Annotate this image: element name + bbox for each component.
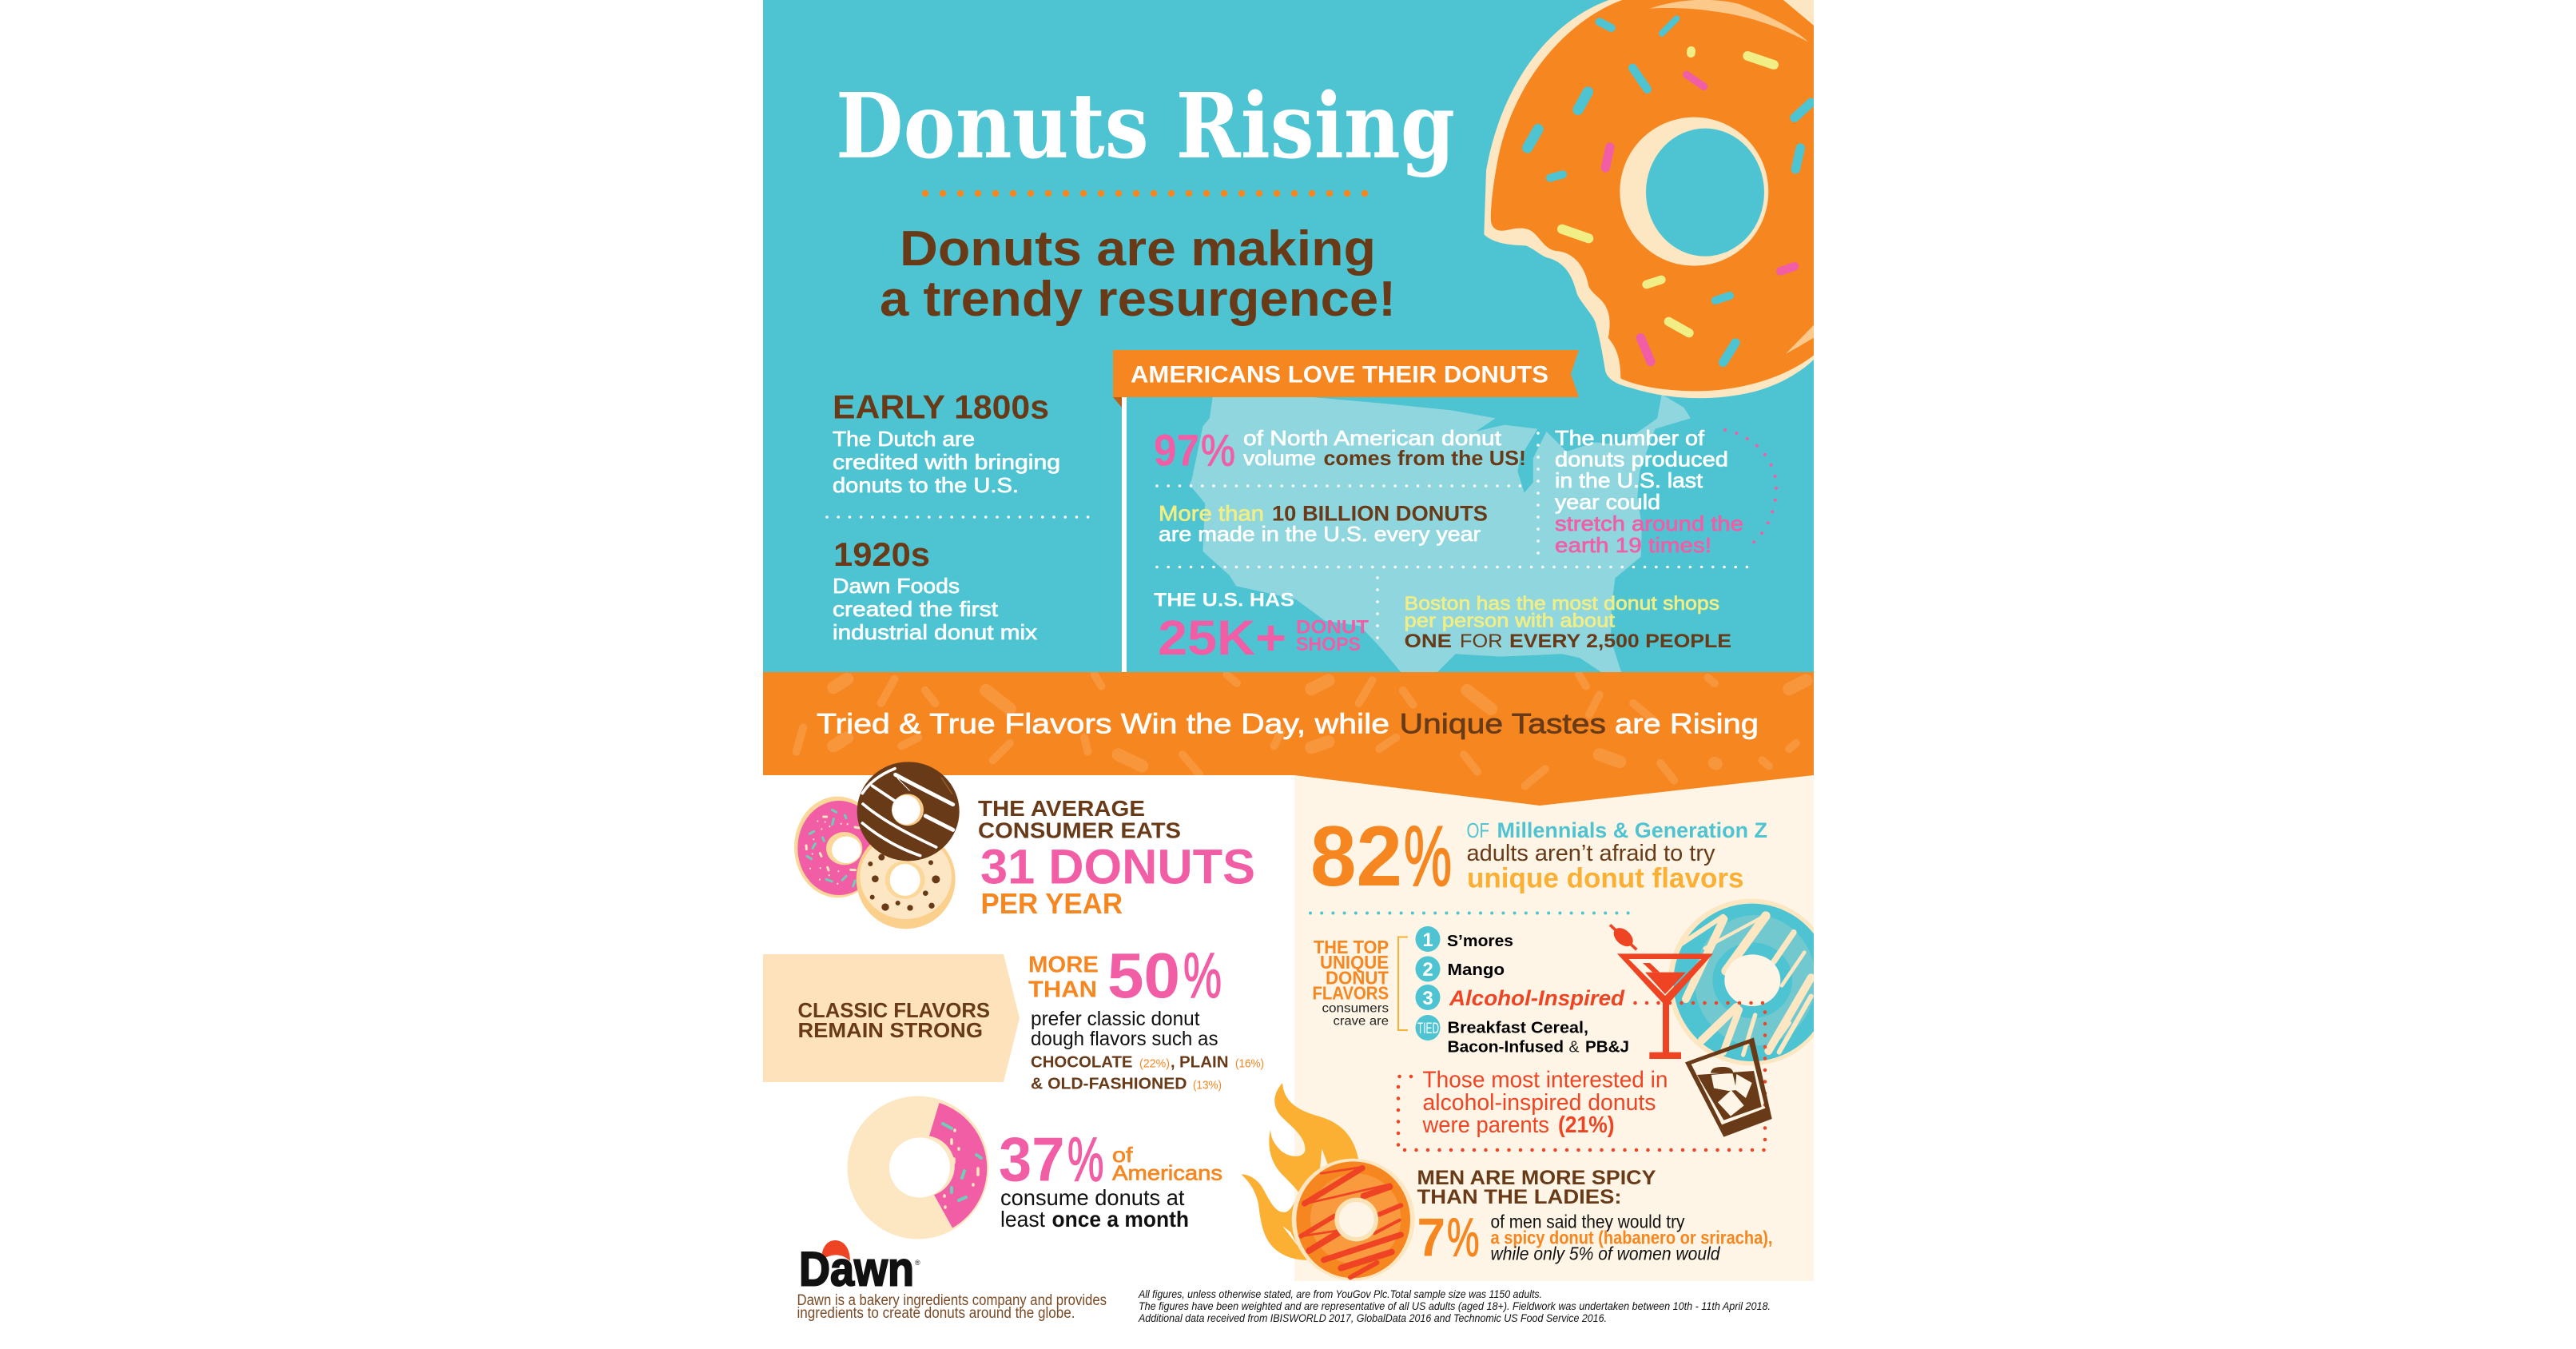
icon: blue glazed donut [1668, 898, 1814, 1066]
stat: 25K donut shops: THE U.S. HAS [1154, 590, 1294, 611]
text block: top unique flavors label: FLAVORS [1312, 983, 1389, 1004]
stat: 37 percent of Americans: consume donuts at [1000, 1185, 1185, 1210]
stat: 82 percent [1310, 808, 1767, 904]
icon: large bitten orange donut [1484, 0, 1815, 398]
text block: 1920s: 1920s [833, 535, 930, 573]
subtitle [880, 221, 1396, 327]
text block: 1920s [833, 535, 1037, 644]
stat: 19 times around the earth: The number of [1555, 426, 1705, 450]
dotted callout frame [1398, 1003, 1765, 1150]
stat: 82 percent: % [1404, 808, 1452, 904]
stat: 31 donuts per year: THE AVERAGE [978, 796, 1145, 821]
stat: 37 percent of Americans: Americans [1112, 1160, 1222, 1184]
stat: 82 percent: 82 [1310, 808, 1402, 904]
vertical white rule [1122, 397, 1127, 672]
stat: 10 billion donuts: More than [1159, 502, 1264, 526]
stat: 97 percent [1154, 425, 1526, 475]
list: ranked unique flavors: S’mores [1447, 933, 1513, 950]
title dotted divider [925, 190, 1366, 197]
stat: Boston donut shops: Boston has the most donut shops [1405, 593, 1719, 615]
text block: early 1800s: The Dutch are [833, 427, 975, 451]
stat: more than 50 percent: PLAIN [1179, 1053, 1229, 1071]
stat: men are more spicy [1417, 1167, 1772, 1267]
callout: parents interested in alcohol-inspired donuts: were parents [1422, 1112, 1549, 1138]
list: ranked unique flavors: TIED [1417, 1021, 1439, 1037]
text block: sources footnote: All figures, unless otherwise stated, are from YouGov Plc.Total sample size was 1150 adults. [1138, 1287, 1542, 1300]
stat: 25K donut shops [1154, 590, 1369, 665]
subtitle: a trendy resurgence! [880, 272, 1396, 327]
stat: more than 50 percent: THAN [1028, 977, 1097, 1002]
text block: early 1800s: credited with bringing [833, 450, 1060, 474]
text block: early 1800s [833, 388, 1060, 497]
list: ranked unique flavors: Mango [1448, 961, 1505, 979]
list: ranked unique flavors [1416, 926, 1629, 1057]
band heading: Unique Tastes [1400, 708, 1606, 740]
stat: more than 50 percent: , [1171, 1053, 1175, 1071]
stat: Boston donut shops: ONE [1405, 631, 1452, 652]
stat: men are more spicy: % [1447, 1207, 1480, 1267]
tag: classic flavors [763, 954, 1020, 1082]
stat: 37 percent of Americans: 37 [999, 1124, 1064, 1194]
title: Donuts Rising [836, 74, 1455, 179]
text block: early 1800s: EARLY 1800s [833, 388, 1049, 425]
stat: Boston donut shops [1405, 593, 1731, 652]
stat: 82 percent: Millennials & Generation Z [1497, 818, 1767, 842]
stat: 19 times around the earth: year could [1555, 490, 1660, 514]
text block: top unique flavors label: UNIQUE [1320, 952, 1389, 973]
banner: Americans love their donuts: AMERICANS LOVE THEIR DONUTS [1131, 361, 1548, 388]
map: United States silhouette [1190, 389, 1691, 674]
stat: 31 donuts per year: 31 DONUTS [980, 839, 1255, 893]
stat: 31 donuts per year: PER YEAR [981, 887, 1123, 920]
stat: 25K donut shops: 25K+ [1158, 611, 1286, 665]
stat: 82 percent: adults aren’t afraid to try [1467, 841, 1715, 866]
list: ranked unique flavors: Bacon-Infused [1448, 1039, 1564, 1057]
text block: sources footnote: Additional data received from IBISWORLD 2017, GlobalData 2016 and Technomic US Food Service 2016. [1138, 1311, 1607, 1324]
list: ranked unique flavors: PB&J [1585, 1039, 1629, 1057]
orange band with sprinkles [763, 672, 1814, 806]
stat: men are more spicy: MEN ARE MORE SPICY [1417, 1167, 1656, 1189]
stat: 10 billion donuts [1159, 502, 1488, 546]
text block: top unique flavors label: crave are [1333, 1015, 1389, 1028]
stat: 37 percent of Americans [999, 1124, 1222, 1232]
stat: more than 50 percent: prefer classic donut [1031, 1008, 1200, 1030]
list: ranked unique flavors: Breakfast Cereal, [1448, 1020, 1588, 1037]
stat: 37 percent of Americans: once a month [1051, 1207, 1189, 1232]
stat: more than 50 percent: MORE [1028, 953, 1099, 978]
text block: about Dawn [797, 1292, 1107, 1322]
stat: 97 percent: comes from the US! [1323, 446, 1526, 470]
stat: 19 times around the earth [1555, 426, 1776, 557]
list: ranked unique flavors: 1 [1422, 929, 1433, 951]
stat: more than 50 percent: (13%) [1193, 1079, 1222, 1092]
stat: more than 50 percent: % [1183, 940, 1222, 1011]
stat: 97 percent: of North American donut [1243, 426, 1502, 450]
logo: Dawn: Dawn [799, 1242, 914, 1296]
stat: 37 percent of Americans: of [1112, 1143, 1133, 1167]
stat: 37 percent of Americans: least [1000, 1207, 1045, 1232]
callout: parents interested in alcohol-inspired donuts: alcohol-inspired donuts [1422, 1090, 1656, 1116]
panel: cream unique-flavors background [1294, 775, 1814, 1281]
text block: top unique flavors label: DONUT [1326, 967, 1389, 988]
band heading: are Rising [1615, 708, 1759, 740]
tag: classic flavors: REMAIN STRONG [797, 1018, 983, 1042]
stat: 31 donuts per year: CONSUMER EATS [978, 818, 1181, 842]
text block: about Dawn: ingredients to create donuts around the globe. [797, 1305, 1075, 1322]
stat: 19 times around the earth: earth 19 times! [1555, 533, 1711, 557]
text block: about Dawn: Dawn is a bakery ingredients company and provides [797, 1292, 1107, 1309]
stat: more than 50 percent: (16%) [1235, 1057, 1264, 1071]
tag: classic flavors: CLASSIC FLAVORS [797, 998, 990, 1022]
callout: parents interested in alcohol-inspired donuts [1422, 1068, 1668, 1138]
list: ranked unique flavors: & [1569, 1039, 1580, 1057]
stat: 25K donut shops: SHOPS [1296, 634, 1361, 655]
text block: sources footnote: The figures have been weighted and are representative of all US adults (aged 18+). Fieldwork was undertaken between 10th - 11th April 2018. [1139, 1299, 1771, 1312]
logo: Dawn: ® [915, 1259, 920, 1267]
stat: men are more spicy: a spicy donut (habanero or sriracha), [1491, 1228, 1772, 1248]
list: ranked unique flavors: Alcohol-Inspired [1449, 986, 1625, 1010]
text block: top unique flavors label: THE TOP [1314, 937, 1389, 957]
text block: top unique flavors label [1312, 937, 1389, 1028]
band heading [817, 708, 1759, 740]
stat: 37 percent of Americans: % [1067, 1124, 1104, 1194]
stat: 19 times around the earth: donuts produced [1555, 448, 1728, 472]
banner: Americans love their donuts [1113, 350, 1579, 408]
stat: 97 percent: 97 [1154, 425, 1199, 475]
subtitle: Donuts are making [900, 221, 1376, 277]
text block: sources footnote [1138, 1287, 1771, 1324]
stat: 82 percent: unique donut flavors [1467, 863, 1743, 893]
stat: 97 percent: % [1201, 425, 1235, 475]
stat: more than 50 percent: (22%) [1139, 1057, 1170, 1071]
stat: Boston donut shops: FOR [1460, 631, 1502, 652]
icon: martini glass [1610, 925, 1713, 1059]
stat: more than 50 percent: CHOCOLATE [1031, 1053, 1133, 1071]
callout: parents interested in alcohol-inspired donuts: Those most interested in [1422, 1068, 1668, 1093]
stat: men are more spicy: of men said they would try [1491, 1212, 1685, 1232]
stat: 10 billion donuts: are made in the U.S. every year [1159, 522, 1481, 546]
stat: men are more spicy: THAN THE LADIES: [1417, 1186, 1622, 1208]
stat: men are more spicy: 7 [1417, 1207, 1445, 1267]
stat: more than 50 percent: dough flavors such as [1031, 1028, 1218, 1050]
icon: flaming spicy donut [1241, 1083, 1415, 1280]
stat: 19 times around the earth: in the U.S. last [1555, 468, 1703, 492]
stat: 10 billion donuts: 10 BILLION DONUTS [1272, 502, 1488, 526]
text block: 1920s: industrial donut mix [833, 620, 1037, 644]
callout: parents interested in alcohol-inspired donuts: (21%) [1558, 1112, 1614, 1138]
stat: 82 percent: OF [1467, 818, 1489, 842]
list: ranked unique flavors: 3 [1422, 988, 1433, 1009]
chart: 37 percent donut [847, 1096, 989, 1239]
stat: more than 50 percent: 50 [1107, 940, 1180, 1011]
text block: early 1800s: donuts to the U.S. [833, 473, 1019, 497]
text block: 1920s: Dawn Foods [833, 574, 960, 598]
stat: Boston donut shops: per person with about [1405, 611, 1615, 631]
icon: whiskey glass [1685, 1037, 1772, 1137]
stat: men are more spicy: while only 5% of women would [1491, 1244, 1721, 1264]
band heading: Tried & True Flavors Win the Day, while [817, 708, 1389, 740]
stat: Boston donut shops: EVERY 2,500 PEOPLE [1509, 631, 1731, 652]
stat: more than 50 percent [1028, 940, 1264, 1093]
list: ranked unique flavors: 2 [1422, 959, 1433, 981]
text block: 1920s: created the first [833, 597, 999, 621]
stat: more than 50 percent: & OLD-FASHIONED [1031, 1076, 1187, 1093]
stat: 19 times around the earth: stretch around the [1555, 511, 1743, 535]
icon: trio of donuts [794, 762, 960, 929]
stat: 31 donuts per year [978, 796, 1255, 920]
stat: 25K donut shops: DONUT [1296, 617, 1369, 638]
text block: top unique flavors label: consumers [1322, 1002, 1389, 1015]
stat: 97 percent: volume [1243, 446, 1316, 470]
panel: teal header background [763, 0, 1814, 672]
